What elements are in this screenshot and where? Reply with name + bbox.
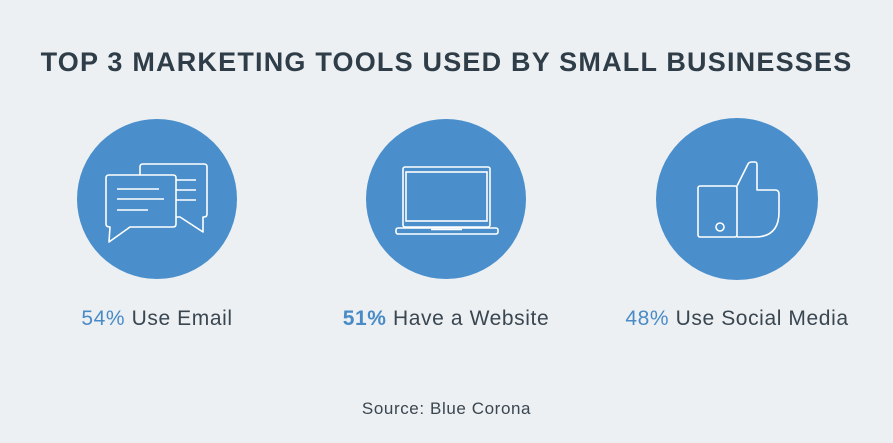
icon: email chat bubbles — [77, 119, 237, 279]
label: social media: 48% Use Social Media — [625, 307, 849, 330]
label: email: 54% Use Email — [81, 307, 233, 330]
source: Source: Blue Corona — [362, 399, 531, 418]
icon: thumbs up — [656, 118, 818, 280]
title: TOP 3 MARKETING TOOLS USED BY SMALL BUSINESSES — [41, 47, 852, 77]
icon: laptop — [366, 119, 526, 279]
label: website: 51% Have a Website — [343, 307, 549, 330]
